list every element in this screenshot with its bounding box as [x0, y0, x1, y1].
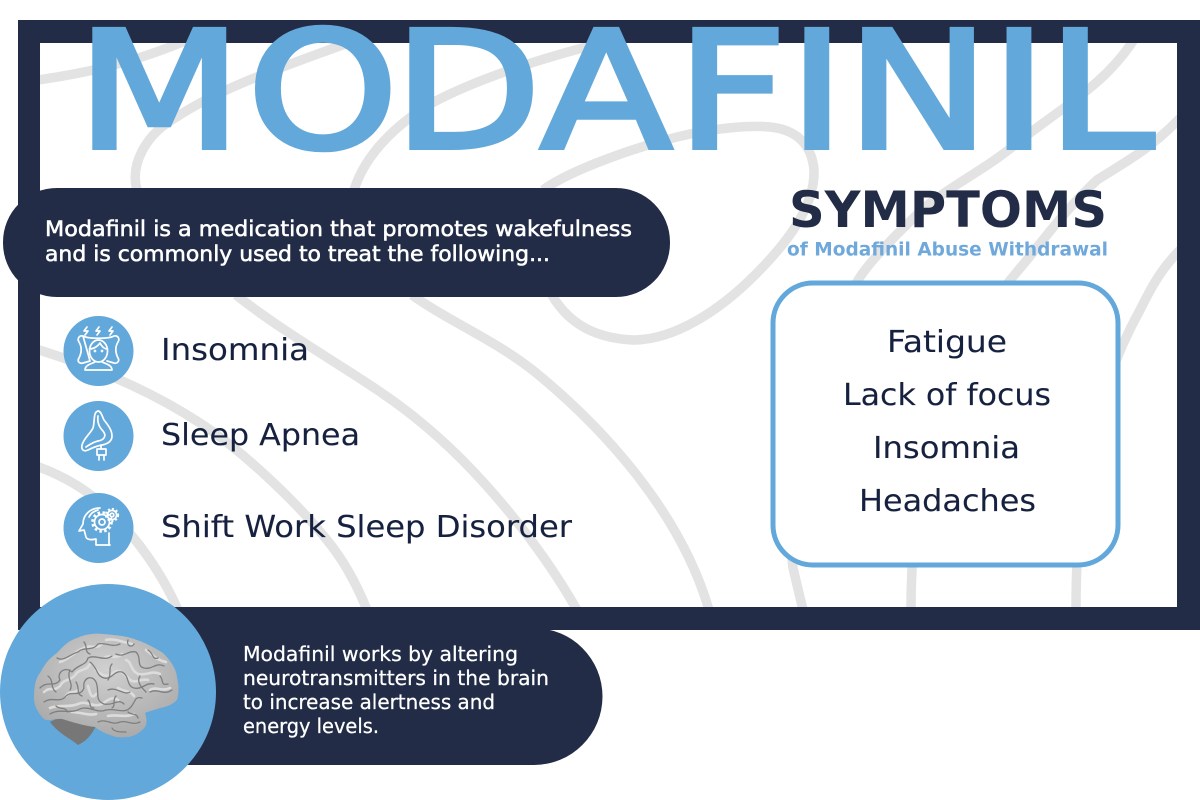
mechanism text: to increase alertness and: [243, 690, 495, 714]
icon: insomnia pillow: [78, 327, 119, 370]
intro text: and is commonly used to treat the following...: [45, 242, 550, 266]
intro text: Modafinil is a medication that promotes wakefulness: [45, 217, 632, 241]
symptom: fatigue: Fatigue: [887, 325, 1007, 360]
label: Sleep Apnea: [161, 418, 360, 453]
panel: mechanism pill: [100, 628, 602, 765]
title: MODAFINIL: [76, 0, 1154, 186]
icon: brain: [34, 634, 178, 745]
label: Shift Work Sleep Disorder: [161, 510, 573, 545]
mechanism text: energy levels.: [243, 714, 379, 738]
frame: [18, 20, 1200, 630]
symptom: insomnia: Insomnia: [873, 431, 1020, 466]
panel: intro pill: [3, 188, 670, 297]
label: Insomnia: [161, 333, 309, 368]
list item: shift work sleep disorder: [64, 493, 573, 563]
mechanism text: neurotransmitters in the brain: [243, 666, 549, 690]
list item: sleep apnea: [64, 401, 360, 471]
heading: symptoms: SYMPTOMS: [789, 181, 1107, 239]
mechanism text: Modafinil works by altering: [243, 642, 518, 666]
intro text: [45, 217, 632, 266]
symptom: lack of focus: Lack of focus: [843, 378, 1051, 413]
brain circle: [0, 584, 216, 800]
panel: symptoms list: [773, 283, 1118, 565]
symptom: headaches: Headaches: [859, 484, 1036, 519]
subheading: of Modafinil Abuse Withdrawal: [787, 238, 1108, 260]
mechanism text: [243, 642, 549, 738]
list item: insomnia: [64, 316, 309, 386]
icon: head with gears: [79, 508, 118, 545]
icon: cpap mask: [82, 411, 112, 460]
